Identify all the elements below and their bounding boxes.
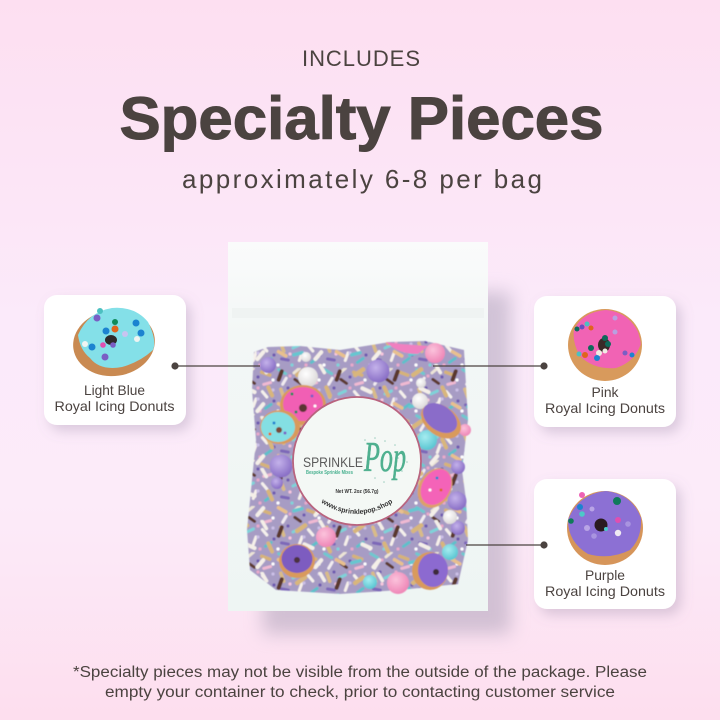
- card: purple: Royal Icing Donuts: [545, 583, 665, 599]
- label sticker: Pop: [363, 435, 406, 481]
- card: light blue: Royal Icing Donuts: [54, 398, 174, 414]
- label: pink: Pink: [592, 384, 619, 400]
- connector: pink: [433, 362, 548, 370]
- product bag: [228, 242, 488, 611]
- connector: purple: [466, 541, 548, 549]
- icon: pink donut: [568, 309, 642, 381]
- mini donuts in the bag: [260, 385, 468, 590]
- label sticker: www.sprinklepop.shop: [322, 499, 392, 515]
- logo: SPRINKLE: [303, 454, 363, 470]
- label: purple: Purple: [585, 567, 625, 583]
- card: light blue: [44, 295, 186, 425]
- card: pink: Royal Icing Donuts: [545, 400, 665, 416]
- candy balls: [260, 342, 471, 594]
- label sticker: [292, 396, 422, 526]
- footnote: empty your container to check, prior to contacting customer service: [105, 684, 615, 701]
- card: purple: [534, 479, 676, 609]
- bag shadow: [263, 292, 511, 634]
- icon: purple donut: [567, 491, 643, 565]
- logo dots: [364, 437, 408, 483]
- bag zip seal: [232, 308, 484, 318]
- footnote: *Specialty pieces may not be visible from the outside of the package. Please: [73, 664, 647, 681]
- title: Specialty Pieces: [120, 85, 604, 152]
- icon: light blue donut: [69, 305, 159, 381]
- footnote: [73, 664, 647, 701]
- connector: light blue: [171, 362, 260, 370]
- card: pink: [534, 296, 676, 427]
- label sticker: Bespoke Sprinkle Mixes: [306, 470, 353, 476]
- sprinkle mix: [240, 335, 475, 600]
- heading: includes: INCLUDES: [302, 46, 420, 71]
- label sticker: Net WT. 2oz (56.7g): [336, 489, 379, 495]
- subtitle: approximately 6-8 per bag: [182, 164, 542, 194]
- label: light blue: Light Blue: [84, 382, 145, 398]
